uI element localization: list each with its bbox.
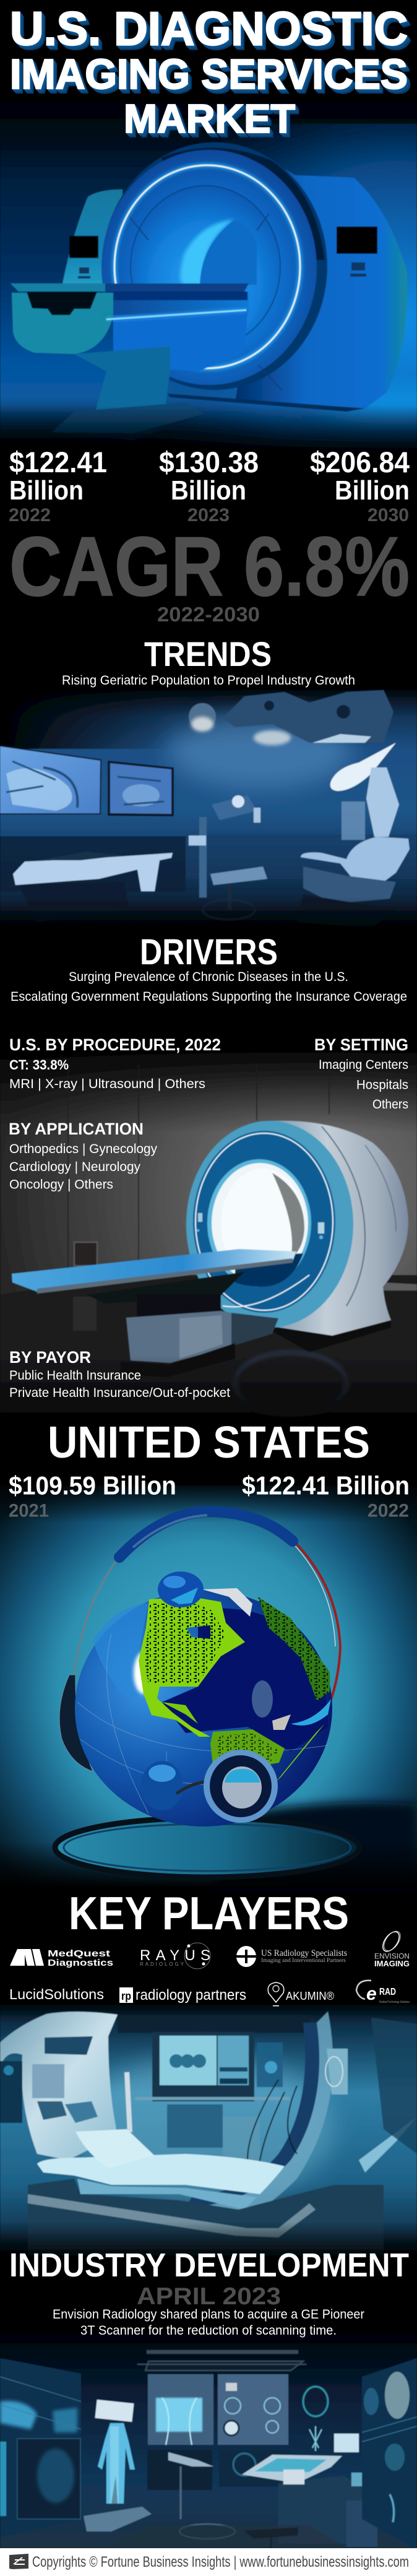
icon: hologram body <box>84 2400 152 2531</box>
icon: bed base <box>28 2179 384 2259</box>
icon: eastern continent <box>258 1597 330 1701</box>
logo: Akumin <box>268 1982 334 2007</box>
heading: drivers: DRIVERS <box>140 932 278 972</box>
icon: table pedestal <box>87 1272 244 1303</box>
stat: 2022 US market: 2022 <box>368 1500 409 1521</box>
chart text: by application: Oncology | Others <box>9 1177 113 1192</box>
stat: 2023 market size: 2023 <box>187 505 230 525</box>
icon: hanging tubes <box>247 2080 285 2166</box>
icon: grid lines <box>77 1634 328 1813</box>
chart text: by setting: Hospitals <box>356 1078 408 1092</box>
chart text: by procedure: MRI | X-ray | Ultrasound | Others <box>9 1077 205 1091</box>
chart text: by payor: BY PAYOR <box>9 1348 91 1367</box>
icon: wires <box>74 1557 119 1675</box>
icon: overhead robot arm <box>189 690 393 745</box>
title: IMAGING SERVICES <box>10 51 408 98</box>
panel: hero MRI scanner illustration <box>0 0 417 452</box>
chart text: by application: Cardiology | Neurology <box>9 1160 140 1174</box>
chart text: by payor <box>9 1348 230 1400</box>
logo: US Radiology Specialists: US Radiology Specialists <box>261 1948 347 1958</box>
logo: RAYUS Radiology: RAYUS <box>140 1947 210 1964</box>
panel: MRI room background <box>0 1046 417 1430</box>
icon: rail <box>135 2097 290 2100</box>
icon: stethoscope head <box>204 1750 278 1823</box>
stat: 2021 US market <box>9 1471 176 1521</box>
icon: right pod arc <box>186 2023 319 2207</box>
icon: scanner ring <box>101 142 327 390</box>
icon: center panels <box>147 2374 291 2490</box>
panel: globe illustration <box>0 1479 417 1888</box>
icon: table surface <box>12 1249 296 1292</box>
logo: MedQuest Diagnostics <box>10 1948 113 1968</box>
icon: MRI front ring <box>186 1121 353 1328</box>
heading: industry development: 3T Scanner for the reduction of scanning time. <box>80 2323 337 2338</box>
logo: Envision Imaging <box>374 1929 410 1968</box>
icon: chair and hologram stream <box>168 2452 235 2539</box>
stat: 2023 market size: Billion <box>171 475 246 506</box>
logo: RAYUS Radiology <box>140 1943 210 1969</box>
stat: 2022 market size <box>9 446 107 525</box>
icon: central instrument stand <box>189 795 267 920</box>
heading: drivers <box>11 932 407 1004</box>
heading: industry development <box>9 2247 409 2338</box>
stat: 2030 market size: 2030 <box>368 505 409 525</box>
icon: scanner right housing <box>235 167 407 408</box>
icon: left pod wall <box>0 2012 118 2160</box>
chart text: by payor: Public Health Insurance <box>9 1368 141 1383</box>
logo: eRAD: e <box>366 1984 377 2004</box>
icon: scanner base strip <box>167 394 365 412</box>
icon: mattress <box>37 2154 285 2194</box>
stat: 2021 US market: 2021 <box>9 1500 49 1521</box>
icon: floor <box>105 2525 346 2548</box>
stat: CAGR: 2022-2030 <box>157 603 260 626</box>
heading: industry development: Envision Radiology shared plans to acquire a GE Pioneer <box>53 2307 364 2322</box>
logo: US Radiology Specialists: Imaging and Interventional Partners <box>261 1957 346 1963</box>
icon: bore crescent <box>180 220 234 285</box>
chart text: by payor: Private Health Insurance/Out-of-pocket <box>9 1386 230 1400</box>
icon: right wall displays <box>303 2358 417 2550</box>
icon: scanner left housing <box>62 189 124 291</box>
icon: control console <box>242 2434 377 2547</box>
logo: eRAD: RAD <box>379 1987 396 1997</box>
heading: trends: Rising Geriatric Population to Propel Industry Growth <box>62 673 355 688</box>
chart text: by application <box>9 1120 157 1192</box>
icon: glowing ring <box>114 165 300 368</box>
icon: dark ocean <box>162 1608 328 1752</box>
icon: patient table <box>11 283 249 371</box>
icon: left wall displays <box>0 2358 81 2538</box>
stat: 2022 US market <box>242 1471 410 1521</box>
icon: pillow <box>75 2129 154 2168</box>
chart text: by procedure: U.S. BY PROCEDURE, 2022 <box>9 1035 221 1054</box>
icon: right screen <box>337 227 377 254</box>
chart text: by application: BY APPLICATION <box>9 1120 144 1138</box>
chart text: by setting <box>314 1035 408 1112</box>
icon: back wall monitor <box>152 2032 254 2101</box>
panel: futuristic scanner bed illustration <box>0 2002 417 2259</box>
title: MARKET <box>124 96 295 141</box>
icon: MRI scanner body <box>260 1121 408 1336</box>
panel: hologram lab illustration <box>0 2333 417 2550</box>
logo: Lucid Solutions: LucidSolutions <box>9 1986 104 2002</box>
icon: North America cities <box>144 1603 226 1683</box>
stat: 2030 market size <box>310 446 410 525</box>
heading: United States: UNITED STATES <box>48 1418 370 1467</box>
panel: footer bar <box>0 2548 417 2576</box>
icon: housing badges <box>78 262 366 279</box>
icon: surgical light and arm <box>330 743 399 840</box>
icon: Fortune Business Insights logo <box>9 2554 28 2569</box>
chart text: by application: Orthopedics | Gynecology <box>9 1142 157 1156</box>
icon: South America <box>210 1729 285 1770</box>
logo: US Radiology Specialists <box>236 1946 347 1967</box>
icon: stool <box>246 2528 297 2548</box>
heading: drivers: Escalating Government Regulations Supporting the Insurance Coverage <box>11 990 407 1004</box>
stat: 2030 market size: $206.84 <box>310 446 410 478</box>
logo: eRAD <box>356 1981 410 2004</box>
icon: left ear piece <box>59 1675 93 1771</box>
logo: Envision Imaging: ENVISION <box>374 1952 410 1961</box>
icon: patient chair <box>297 837 410 928</box>
stat: 2023 market size: $130.38 <box>159 446 259 478</box>
stat: 2022 market size: $122.41 <box>9 446 107 478</box>
title: U.S. DIAGNOSTIC <box>10 2 408 56</box>
icon: headband <box>119 1511 293 1557</box>
icon: white polar cap <box>202 1588 252 1617</box>
icon: bottom of the bore <box>235 1253 303 1287</box>
heading: industry development: APRIL 2023 <box>137 2283 281 2310</box>
icon: North America <box>139 1597 245 1737</box>
logo: Akumin: AKUMIN® <box>286 1990 334 2002</box>
chart text: by setting: BY SETTING <box>314 1035 408 1054</box>
logo: RAYUS Radiology: RADIOLOGY <box>140 1961 184 1967</box>
icon: left monitor <box>0 745 101 815</box>
chart text: by procedure <box>9 1035 221 1091</box>
icon: right monitor <box>108 761 174 816</box>
icon: highlight <box>134 1652 153 1694</box>
logo: MedQuest Diagnostics: Diagnostics <box>48 1958 113 1968</box>
stat: 2022 market size: Billion <box>9 475 84 506</box>
icon: top chest ball <box>158 1571 204 1607</box>
logo: radiology partners: radiology partners <box>135 1987 246 2003</box>
logo: MedQuest Diagnostics: MedQuest <box>48 1948 110 1959</box>
icon: base stethoscope loop <box>55 1818 359 1877</box>
stat: 2022 market size: 2022 <box>9 505 51 525</box>
chart text: by procedure: CT: 33.8% <box>9 1057 69 1073</box>
icon: globe sphere <box>75 1590 332 1826</box>
stat: 2030 market size: Billion <box>335 475 410 506</box>
heading: key players: KEY PLAYERS <box>69 1887 349 1939</box>
stat: 2023 market size <box>159 446 259 525</box>
icon: ceiling <box>137 2361 306 2371</box>
title <box>10 2 408 141</box>
icon: left treatment bed <box>13 852 173 922</box>
icon: MRI control panels <box>197 1213 324 1239</box>
stat: 2021 US market: $109.59 Billion <box>9 1471 176 1500</box>
chart text: by setting: Imaging Centers <box>319 1058 408 1072</box>
icon: table pedestal <box>74 347 170 415</box>
heading: trends <box>62 634 355 688</box>
logo: Envision Imaging: IMAGING <box>374 1959 410 1968</box>
icon: lower ball <box>141 1761 183 1810</box>
chart text: by setting: Others <box>372 1097 408 1112</box>
icon: left screen <box>69 236 98 258</box>
logo: radiology partners: rp <box>121 1990 131 2002</box>
heading: drivers: Surging Prevalence of Chronic Diseases in the U.S. <box>69 970 348 984</box>
heading: trends: TRENDS <box>144 634 272 673</box>
panel: operating room illustration <box>0 687 417 935</box>
